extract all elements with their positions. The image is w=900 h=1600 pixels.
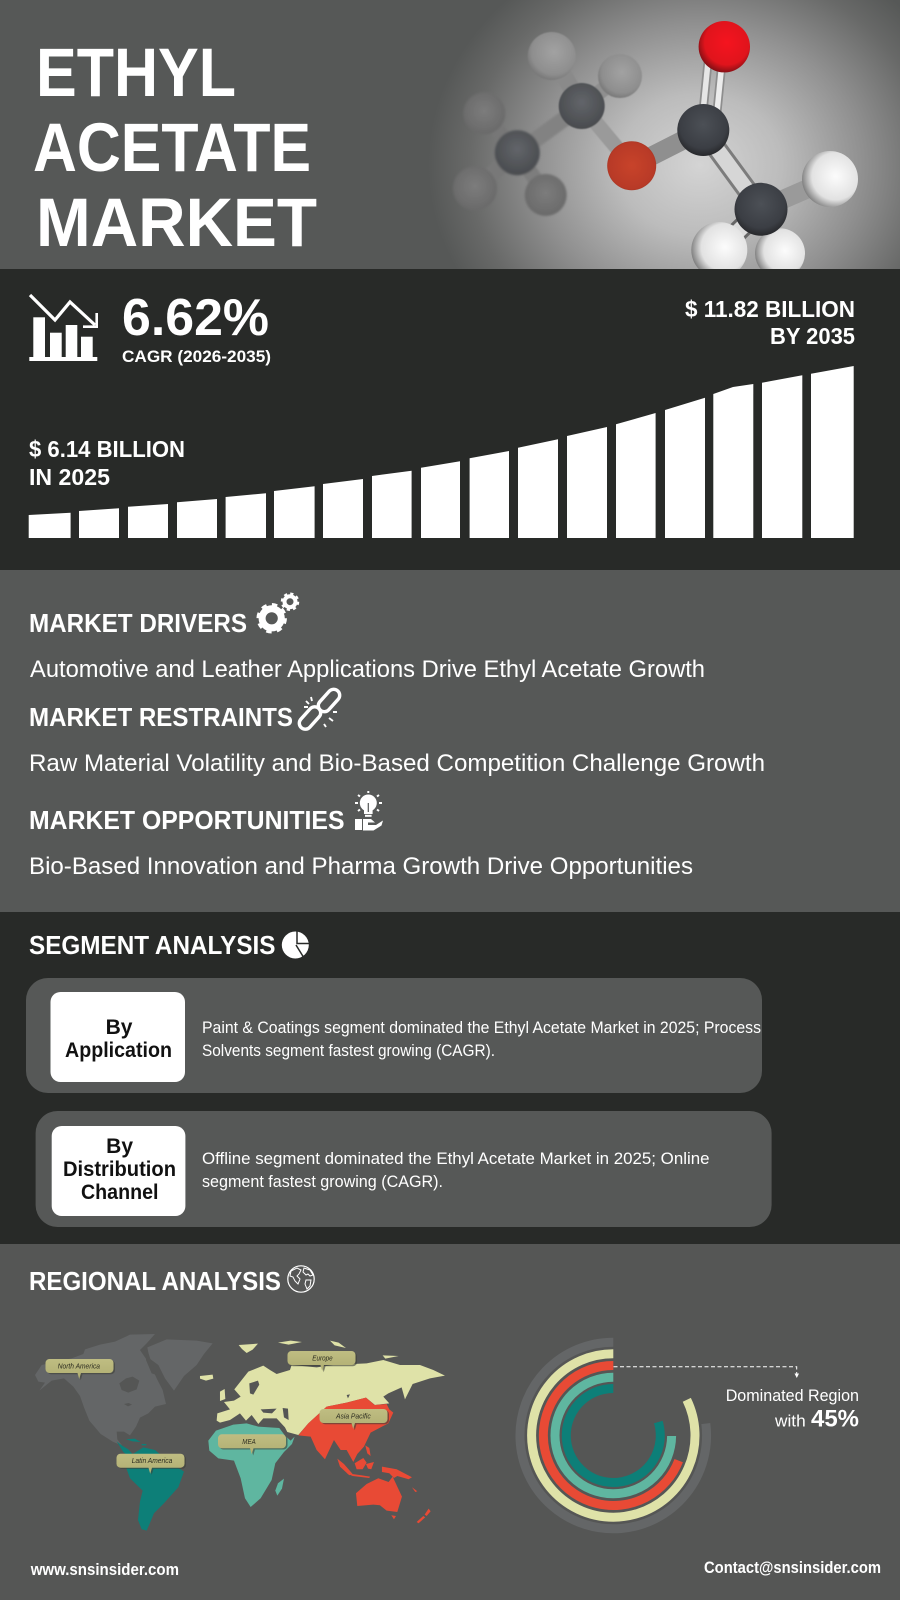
heading: regional analysis: REGIONAL ANALYSIS bbox=[29, 1266, 281, 1296]
callout: dominated region bbox=[726, 1386, 859, 1433]
text: drivers: Automotive and Leather Applications Drive Ethyl Acetate Growth bbox=[30, 656, 705, 683]
region: asia pacific bbox=[298, 1398, 431, 1523]
region: north america bbox=[35, 1334, 213, 1445]
footer: website: www.snsinsider.com bbox=[30, 1560, 179, 1579]
icon: lightbulb in hand bbox=[355, 791, 383, 830]
icon: broken chain bbox=[297, 687, 342, 732]
text: restraints: Raw Material Volatility and Bio-Based Competition Challenge Growth bbox=[29, 750, 765, 777]
text: application summary: Paint & Coatings segment dominated the Ethyl Acetate Market in 2025; Process bbox=[202, 1018, 761, 1037]
icon: gears bbox=[258, 594, 298, 632]
text: opportunities: Bio-Based Innovation and Pharma Growth Drive Opportunities bbox=[29, 853, 693, 880]
CAGR stat: 6.62% bbox=[122, 289, 269, 347]
callout: dominated region: with bbox=[774, 1412, 806, 1431]
callout: dominated region: Dominated Region bbox=[726, 1386, 859, 1405]
callout: dominated region: 45% bbox=[811, 1406, 859, 1433]
region: europe and north asia bbox=[200, 1341, 445, 1435]
text: application summary bbox=[202, 1018, 761, 1060]
heading: market opportunities: MARKET OPPORTUNITIES bbox=[29, 805, 344, 835]
label box: by application: Application bbox=[65, 1039, 172, 1062]
seas bbox=[249, 1381, 350, 1420]
title: ETHYL bbox=[36, 34, 236, 111]
title: ACETATE bbox=[33, 109, 311, 186]
heading: segment analysis: SEGMENT ANALYSIS bbox=[29, 930, 276, 960]
heading: market drivers: MARKET DRIVERS bbox=[29, 608, 247, 638]
callout: asia pacific bbox=[320, 1409, 389, 1430]
callout: middle east and africa bbox=[218, 1434, 288, 1456]
label box: by distribution channel bbox=[52, 1126, 185, 1216]
world map bbox=[35, 1334, 445, 1531]
label box: by distribution channel: Distribution bbox=[63, 1158, 176, 1181]
text: distribution summary bbox=[202, 1149, 710, 1191]
2025 value label: $ 6.14 BILLION bbox=[29, 436, 185, 462]
2035 value label bbox=[685, 296, 855, 349]
panel: by distribution channel bbox=[36, 1111, 772, 1227]
callout: europe bbox=[288, 1351, 357, 1372]
callout: latin america: Latin America bbox=[132, 1458, 172, 1465]
title: MARKET bbox=[36, 184, 317, 261]
CAGR stat: CAGR (2026-2035) bbox=[122, 347, 271, 366]
radial chart: regional share bbox=[520, 1342, 707, 1529]
icon: pie chart bbox=[282, 932, 309, 958]
region: latin america bbox=[117, 1439, 184, 1531]
title bbox=[33, 34, 317, 261]
panel: by application bbox=[26, 978, 762, 1093]
region: middle east and africa bbox=[208, 1423, 295, 1507]
header panel with molecule bbox=[446, 0, 900, 269]
icon: globe bbox=[288, 1266, 314, 1292]
2025 value label: IN 2025 bbox=[29, 464, 110, 490]
2035 value label: BY 2035 bbox=[770, 323, 855, 349]
callout: north america: North America bbox=[58, 1364, 100, 1370]
icon: declining bar chart bbox=[29, 295, 97, 361]
callout: asia pacific: Asia Pacific bbox=[335, 1414, 371, 1420]
callout: europe: Europe bbox=[312, 1356, 333, 1362]
dashed leader arrow bbox=[614, 1367, 799, 1378]
callout: north america bbox=[46, 1359, 115, 1380]
text: distribution summary: Offline segment dominated the Ethyl Acetate Market in 2025; Online bbox=[202, 1149, 710, 1168]
2025 value label bbox=[29, 436, 185, 490]
callout: latin america bbox=[116, 1454, 186, 1475]
label box: by application bbox=[50, 992, 185, 1082]
2035 value label: $ 11.82 BILLION bbox=[685, 296, 855, 322]
label box: by distribution channel: Channel bbox=[81, 1181, 158, 1204]
label box: by application: By bbox=[106, 1016, 133, 1039]
heading: market restraints: MARKET RESTRAINTS bbox=[29, 702, 293, 732]
callout: middle east and africa: MEA bbox=[242, 1439, 256, 1446]
text: application summary: Solvents segment fastest growing (CAGR). bbox=[202, 1041, 495, 1060]
bar chart: market growth bbox=[29, 366, 854, 538]
text: distribution summary: segment fastest growing (CAGR). bbox=[202, 1172, 443, 1191]
molecule illustration bbox=[453, 21, 858, 278]
label box: by distribution channel: By bbox=[106, 1135, 133, 1158]
